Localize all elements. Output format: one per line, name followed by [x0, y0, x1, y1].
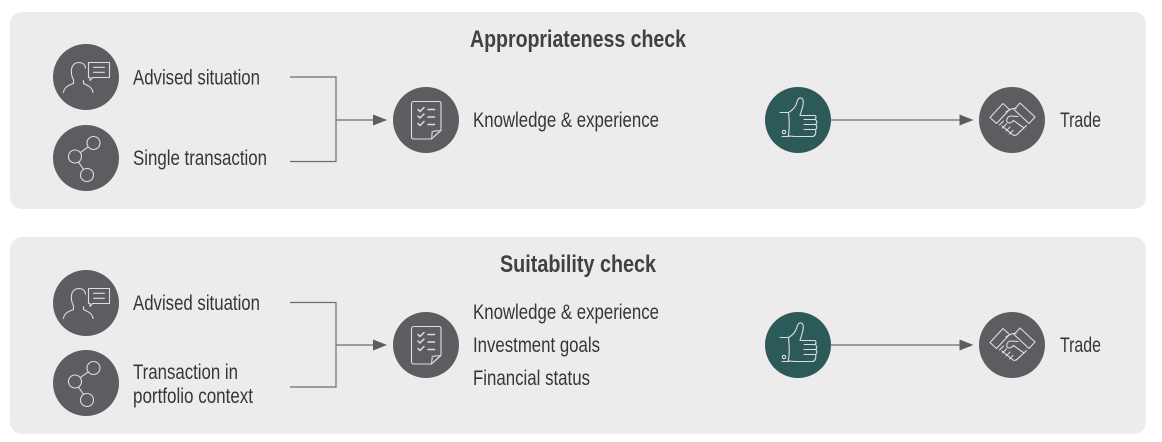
panel: appropriateness check	[10, 12, 1146, 209]
label: transaction in portfolio context: Transaction in	[133, 361, 238, 384]
icon: advisor person with speech bubble	[53, 44, 119, 110]
label: transaction in portfolio context: portfolio context	[133, 385, 253, 408]
heading: suitability check: Suitability check	[500, 251, 657, 278]
label: transaction in portfolio context	[133, 361, 253, 408]
icon: handshake	[979, 312, 1045, 378]
label list: knowledge, goals, financial status	[473, 301, 659, 390]
icon: checklist document	[393, 312, 459, 378]
label list: knowledge, goals, financial status: Knowledge & experience	[473, 301, 659, 324]
label list: knowledge, goals, financial status: Financial status	[473, 367, 590, 390]
icon: thumbs up	[765, 312, 831, 378]
arrow: approval to trade	[831, 114, 974, 126]
icon: checklist document	[393, 87, 459, 153]
connector bracket with arrow	[290, 302, 387, 387]
panel: suitability check	[10, 237, 1146, 434]
label: single transaction: Single transaction	[133, 147, 267, 170]
arrow: approval to trade	[831, 340, 974, 350]
icon: thumbs up	[765, 87, 831, 153]
icon: handshake	[979, 87, 1045, 153]
label: trade: Trade	[1060, 334, 1101, 357]
label list: knowledge, goals, financial status: Investment goals	[473, 334, 600, 357]
label: advised situation: Advised situation	[133, 292, 260, 315]
label: advised situation: Advised situation	[133, 66, 260, 90]
icon: advisor person with speech bubble	[53, 270, 119, 336]
icon: transaction nodes	[53, 125, 119, 191]
heading: appropriateness check: Appropriateness check	[470, 26, 687, 53]
label: knowledge and experience: Knowledge & experience	[473, 109, 659, 132]
icon: transaction nodes	[53, 350, 119, 416]
connector bracket with arrow	[290, 77, 387, 162]
label: trade: Trade	[1060, 109, 1101, 132]
